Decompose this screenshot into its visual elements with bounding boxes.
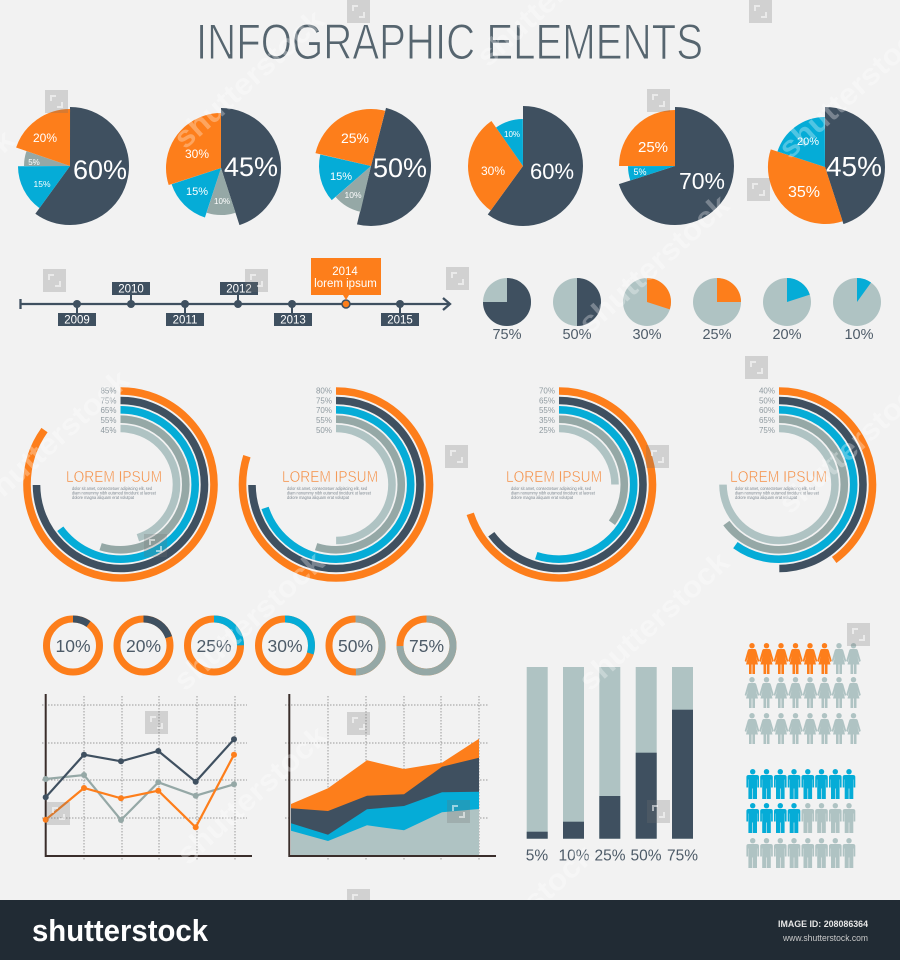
radial chart 1: 45%	[100, 426, 116, 435]
radial chart 3: 35%	[539, 416, 555, 425]
radial chart 4: dolor sit amet, consectetuer adipiscing elit, sed	[735, 486, 815, 491]
radial chart 2: dolor sit amet, consectetuer adipiscing elit, sed	[287, 486, 367, 491]
bar 25%: 25%	[594, 848, 626, 864]
donut 30%: 30%	[267, 636, 303, 656]
radial chart 4: dolore magna aliquam erat volutpat	[735, 495, 798, 500]
radial chart 2: diam nonummy nibh euismod tincidunt ut laoreet	[287, 490, 372, 495]
radial chart 1: dolore magna aliquam erat volutpat	[72, 495, 135, 500]
donut 50%: 50%	[338, 636, 373, 656]
pie chart 1: 60%	[11, 107, 129, 225]
footer bar	[0, 900, 900, 960]
radial chart 3: 65%	[539, 396, 555, 406]
pie chart 1: 60%: 20%	[33, 131, 57, 145]
pie chart 4: 60%	[463, 106, 583, 226]
pie chart 5: 70%: 25%	[638, 139, 668, 156]
timeline item 2011: 2011	[173, 314, 197, 326]
pie chart 2: 45%: 15%	[186, 186, 208, 198]
watermark overlay: shutterstock	[573, 545, 736, 697]
small pie 20%	[763, 278, 811, 343]
pie chart 1: 60%: 60%	[73, 155, 127, 185]
pie chart 4: 60%: 10%	[504, 130, 520, 139]
watermark overlay: shutterstock	[171, 719, 334, 871]
timeline item 2012: 2012	[226, 284, 252, 296]
donut 30%	[258, 619, 312, 672]
watermark overlay: shutterstock	[168, 545, 331, 697]
radial chart 2: 50%	[316, 426, 332, 435]
donut 20%: 20%	[126, 636, 161, 656]
bar 10%: 10%	[558, 848, 590, 864]
bar 50%: 50%	[630, 848, 662, 864]
radial chart 3: dolore magna aliquam erat volutpat	[511, 495, 574, 500]
small pie 75%	[483, 278, 531, 343]
pie chart 2: 45%: 45%	[224, 152, 278, 182]
timeline item 2012	[220, 282, 258, 308]
area chart	[285, 694, 496, 860]
bar 50%	[630, 667, 662, 864]
radial chart 1: 85%	[100, 387, 116, 396]
bar 75%: 75%	[667, 848, 698, 864]
donut 50%	[329, 619, 382, 672]
pie chart 6: 45%	[765, 107, 885, 227]
men pictogram	[746, 769, 855, 868]
bar 75%	[667, 667, 698, 864]
small pie 10%	[833, 278, 881, 343]
pie chart 2: 45%: 10%	[214, 197, 230, 206]
pie chart 3: 50%	[311, 106, 431, 226]
radial chart 4: 60%	[759, 406, 775, 415]
donut 10%	[46, 619, 100, 672]
radial chart 2: 55%	[316, 416, 332, 425]
radial chart 2: 80%	[316, 387, 332, 396]
radial chart 1: 75%	[100, 396, 116, 406]
radial chart 3: 55%	[539, 406, 555, 415]
pie chart 2: 45%	[161, 108, 281, 228]
donut 10%: 10%	[55, 636, 91, 656]
radial chart 4	[686, 387, 872, 578]
pie chart 4: 60%: 30%	[481, 164, 505, 178]
timeline item 2015	[381, 300, 419, 326]
radial chart 3: 25%	[539, 426, 555, 435]
pie chart 6: 45%: 20%	[797, 136, 819, 148]
radial chart 4: 50%	[759, 396, 775, 406]
small pie 75%: 75%	[492, 327, 522, 343]
radial chart 3: 70%	[539, 387, 555, 396]
small pie 50%	[553, 278, 601, 343]
radial chart 3: diam nonummy nibh euismod tincidunt ut laoreet	[511, 490, 596, 495]
pie chart 5: 70%: 5%	[633, 167, 647, 177]
radial chart 2: dolore magna aliquam erat volutpat	[287, 495, 350, 500]
small pie 20%: 20%	[772, 327, 802, 343]
pie chart 6: 45%: 35%	[788, 184, 820, 201]
radial chart 2: 70%	[316, 406, 332, 415]
donut 25%	[188, 619, 240, 672]
timeline item 2013	[274, 300, 312, 326]
footer logo: shutterstock	[32, 913, 209, 948]
timeline item 2015: 2015	[387, 314, 413, 326]
donut 75%: 75%	[409, 636, 444, 656]
radial chart 4: 40%	[759, 387, 775, 396]
pie chart 6: 45%: 45%	[826, 151, 882, 182]
radial chart 1: dolor sit amet, consectetuer adipiscing elit, sed	[72, 486, 152, 491]
timeline item 2014 callout: lorem ipsum	[314, 278, 377, 290]
timeline item 2009	[58, 300, 96, 326]
timeline item 2014 callout	[311, 258, 381, 308]
pie chart 3: 50%: 15%	[330, 171, 352, 183]
pie chart 5: 70%	[616, 107, 734, 225]
small pie 25%: 25%	[702, 327, 732, 343]
radial chart 4: 75%	[759, 426, 775, 435]
radial chart 4: LOREM IPSUM	[730, 469, 827, 486]
watermark overlay: shutterstock	[168, 3, 331, 155]
radial chart 1: LOREM IPSUM	[66, 469, 162, 486]
radial chart 4: diam nonummy nibh euismod tincidunt ut laoreet	[735, 490, 820, 495]
small pie 50%: 50%	[562, 327, 592, 343]
timeline item 2011	[166, 300, 204, 326]
bar 25%	[594, 667, 626, 864]
line series: orange	[43, 752, 237, 830]
small pie 10%: 10%	[844, 327, 874, 343]
radial chart 1: diam nonummy nibh euismod tincidunt ut laoreet	[72, 490, 157, 495]
radial chart 3	[466, 387, 652, 578]
radial chart 2	[242, 387, 430, 578]
footer url: www.shutterstock.com	[782, 933, 868, 943]
pie chart 3: 50%: 25%	[341, 130, 369, 146]
small pie 30%	[623, 278, 671, 343]
women pictogram	[745, 643, 861, 744]
timeline item 2014 callout: 2014	[332, 266, 358, 278]
line chart	[42, 694, 252, 860]
radial chart 1: 65%	[100, 406, 116, 415]
bar 5%	[526, 667, 548, 864]
bar 10%	[558, 667, 590, 864]
timeline item 2009: 2009	[64, 314, 90, 326]
pie chart 1: 60%: 15%	[33, 179, 51, 189]
radial chart 2: 75%	[316, 396, 332, 406]
watermark overlay: shutterstock	[573, 188, 736, 340]
timeline item 2013: 2013	[280, 314, 306, 326]
radial chart 3: LOREM IPSUM	[506, 469, 602, 486]
timeline	[20, 258, 450, 326]
donut 20%	[117, 619, 170, 672]
radial chart 2: LOREM IPSUM	[282, 469, 378, 486]
pie chart 3: 50%: 10%	[344, 190, 362, 200]
footer image id: IMAGE ID: 208086364	[778, 919, 868, 929]
pie chart 3: 50%: 50%	[373, 153, 427, 183]
pie chart 4: 60%: 60%	[530, 159, 574, 184]
bar 5%: 5%	[526, 848, 548, 864]
line series: gray	[43, 772, 237, 823]
timeline item 2010: 2010	[118, 284, 144, 296]
title: INFOGRAPHIC ELEMENTS	[196, 14, 703, 70]
pie chart 1: 60%: 5%	[28, 158, 40, 167]
pie chart 5: 70%: 70%	[679, 168, 725, 194]
radial chart 1: 55%	[100, 416, 116, 425]
small pie 30%: 30%	[632, 327, 662, 343]
radial chart 4: 65%	[759, 416, 775, 425]
pie chart 2: 45%: 30%	[185, 147, 209, 161]
donut 25%: 25%	[196, 636, 232, 656]
timeline item 2010	[112, 282, 150, 308]
small pie 25%	[693, 278, 741, 343]
radial chart 1	[27, 387, 214, 578]
line series: dark	[43, 736, 237, 800]
radial chart 3: dolor sit amet, consectetuer adipiscing elit, sed	[511, 486, 591, 491]
donut 75%	[400, 619, 453, 672]
